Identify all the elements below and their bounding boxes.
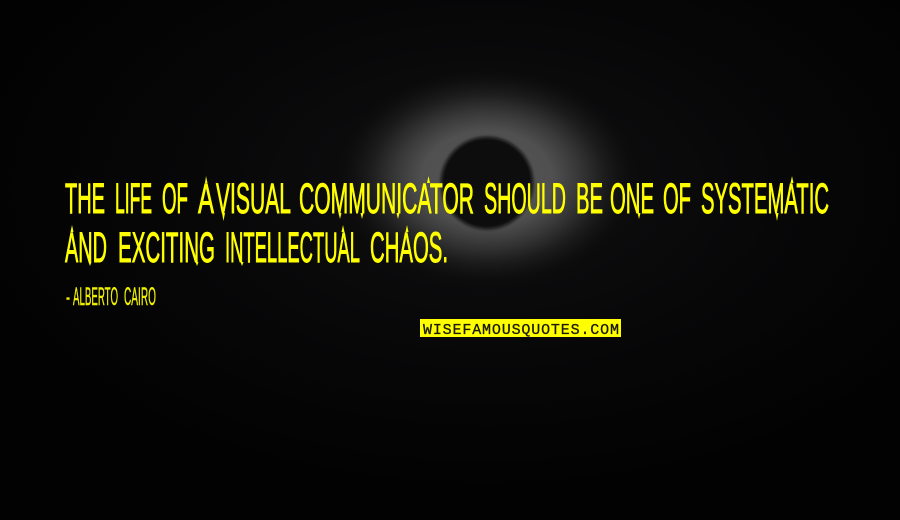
quote line 1: COMMUNICATOR bbox=[299, 175, 474, 223]
quote line 2: INTELLECTUAL bbox=[225, 224, 360, 272]
attribution: ALBERTO bbox=[73, 283, 118, 311]
quote line 1 bbox=[65, 175, 829, 223]
quote line 1: VISUAL bbox=[216, 175, 291, 223]
quote line 2: EXCITING bbox=[118, 224, 215, 272]
quote line 1: SHOULD bbox=[484, 175, 566, 223]
quote line 1: BE bbox=[576, 175, 603, 223]
eclipse bbox=[332, 66, 642, 290]
quote line 2: AND bbox=[65, 224, 107, 272]
quote poster: CAIRO bbox=[124, 283, 156, 311]
attribution: - bbox=[66, 283, 70, 311]
quote text bbox=[65, 175, 829, 272]
quote line 2 bbox=[65, 224, 448, 272]
quote line 1: OF bbox=[663, 175, 691, 223]
quote line 1: OF bbox=[162, 175, 188, 223]
quote line 1: ONE bbox=[610, 175, 654, 223]
eclipse halo bbox=[332, 66, 642, 290]
quote line 1: THE bbox=[65, 175, 105, 223]
quote line 1: A bbox=[198, 175, 214, 223]
quote text: CHAOS. bbox=[370, 224, 448, 272]
watermark badge: WISEFAMOUSQUOTES.COM bbox=[423, 322, 619, 339]
letter spikes bbox=[70, 176, 794, 266]
eclipse disc bbox=[441, 137, 533, 229]
attribution bbox=[66, 283, 156, 311]
quote line 1: LIFE bbox=[115, 175, 152, 223]
